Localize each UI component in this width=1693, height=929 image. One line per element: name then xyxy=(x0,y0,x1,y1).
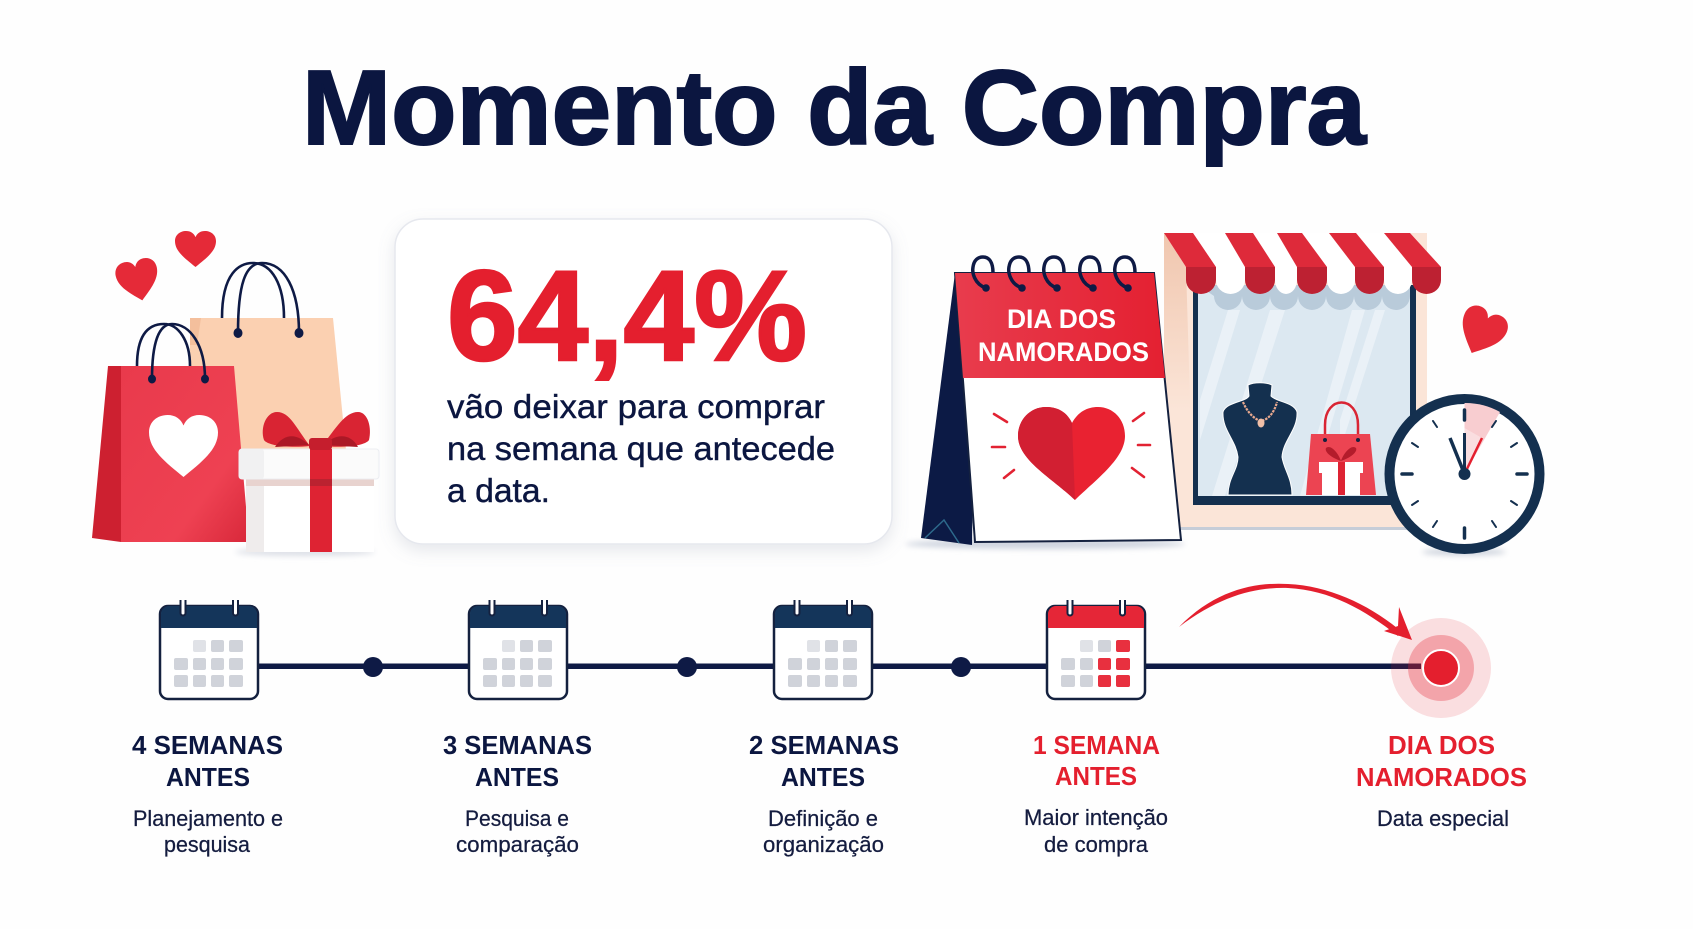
step: 3 weeks: ANTES xyxy=(475,762,559,792)
calendar page xyxy=(955,273,1181,542)
step: 3 weeks xyxy=(443,730,592,857)
step: Dia dos Namorados: Data especial xyxy=(1377,806,1509,831)
icon: heart near store xyxy=(1451,302,1512,363)
mannequin with necklace xyxy=(1223,383,1297,495)
big number: 64,4% xyxy=(447,245,807,388)
icon: clock xyxy=(1390,399,1540,556)
illustration: shopping bags and gift xyxy=(92,231,379,556)
store wall xyxy=(1164,233,1427,528)
calendar red header xyxy=(955,273,1165,378)
step: 2 weeks: Definição e xyxy=(768,806,878,831)
calendar label xyxy=(978,304,1149,367)
step: 1 week: ANTES xyxy=(1055,761,1137,791)
step: Dia dos Namorados: NAMORADOS xyxy=(1356,762,1527,792)
icon: target on the date xyxy=(1391,618,1491,718)
step: 2 weeks xyxy=(749,730,899,857)
statistic description xyxy=(447,389,835,510)
white gift box with red bow xyxy=(235,412,379,556)
striped awning xyxy=(1164,233,1441,294)
step: 4 weeks: ANTES xyxy=(166,762,250,792)
clock ticks xyxy=(1402,410,1527,538)
icon: calendar 4 weeks xyxy=(160,600,258,699)
calendar rings xyxy=(973,257,1135,292)
arrow to target xyxy=(1179,584,1412,640)
statistic description: a data. xyxy=(447,473,550,510)
statistic description: vão deixar para comprar xyxy=(447,389,825,426)
step: 3 weeks: comparação xyxy=(456,832,579,857)
clock hands xyxy=(1450,438,1464,474)
icon: calendar 2 weeks xyxy=(774,600,872,699)
calendar stand xyxy=(921,273,975,545)
timeline dots xyxy=(363,657,971,677)
step: 3 weeks: Pesquisa e xyxy=(465,806,569,831)
icon: calendar 3 weeks xyxy=(469,600,567,699)
step: 1 week: 1 SEMANA xyxy=(1033,730,1160,760)
step: 4 weeks: Planejamento e xyxy=(133,806,283,831)
illustration: storefront xyxy=(1164,233,1441,530)
calendar label: DIA DOS xyxy=(1007,304,1116,334)
peach shopping bag xyxy=(190,263,346,450)
calendar heart xyxy=(1018,407,1125,500)
shop window xyxy=(1193,285,1416,505)
step: 1 week: de compra xyxy=(1044,832,1148,857)
icon: floating hearts xyxy=(113,231,216,305)
step: 1 week xyxy=(1024,730,1168,857)
step: 2 weeks: organização xyxy=(763,832,884,857)
heart rays xyxy=(992,413,1150,478)
step: 4 weeks: 4 SEMANAS xyxy=(132,730,283,760)
red shopping bag xyxy=(92,324,249,542)
step: 3 weeks: 3 SEMANAS xyxy=(443,730,592,760)
step: Dia dos Namorados xyxy=(1356,730,1527,831)
step: 2 weeks: ANTES xyxy=(781,762,865,792)
calendar label: NAMORADOS xyxy=(978,337,1149,367)
small red bag with gift xyxy=(1306,402,1376,495)
step: 2 weeks: 2 SEMANAS xyxy=(749,730,899,760)
step: 1 week: Maior intenção xyxy=(1024,805,1168,830)
statistic description: na semana que antecede xyxy=(447,431,835,468)
icon: calendar 1 week xyxy=(1047,600,1145,699)
panel: 64,4% statistic card xyxy=(395,219,892,544)
title: Momento da Compra xyxy=(302,49,1367,167)
timeline line xyxy=(258,664,1421,669)
step: 4 weeks xyxy=(132,730,283,857)
illustration: desk calendar xyxy=(905,257,1185,549)
step: Dia dos Namorados: DIA DOS xyxy=(1388,730,1495,760)
step: 4 weeks: pesquisa xyxy=(164,832,250,857)
